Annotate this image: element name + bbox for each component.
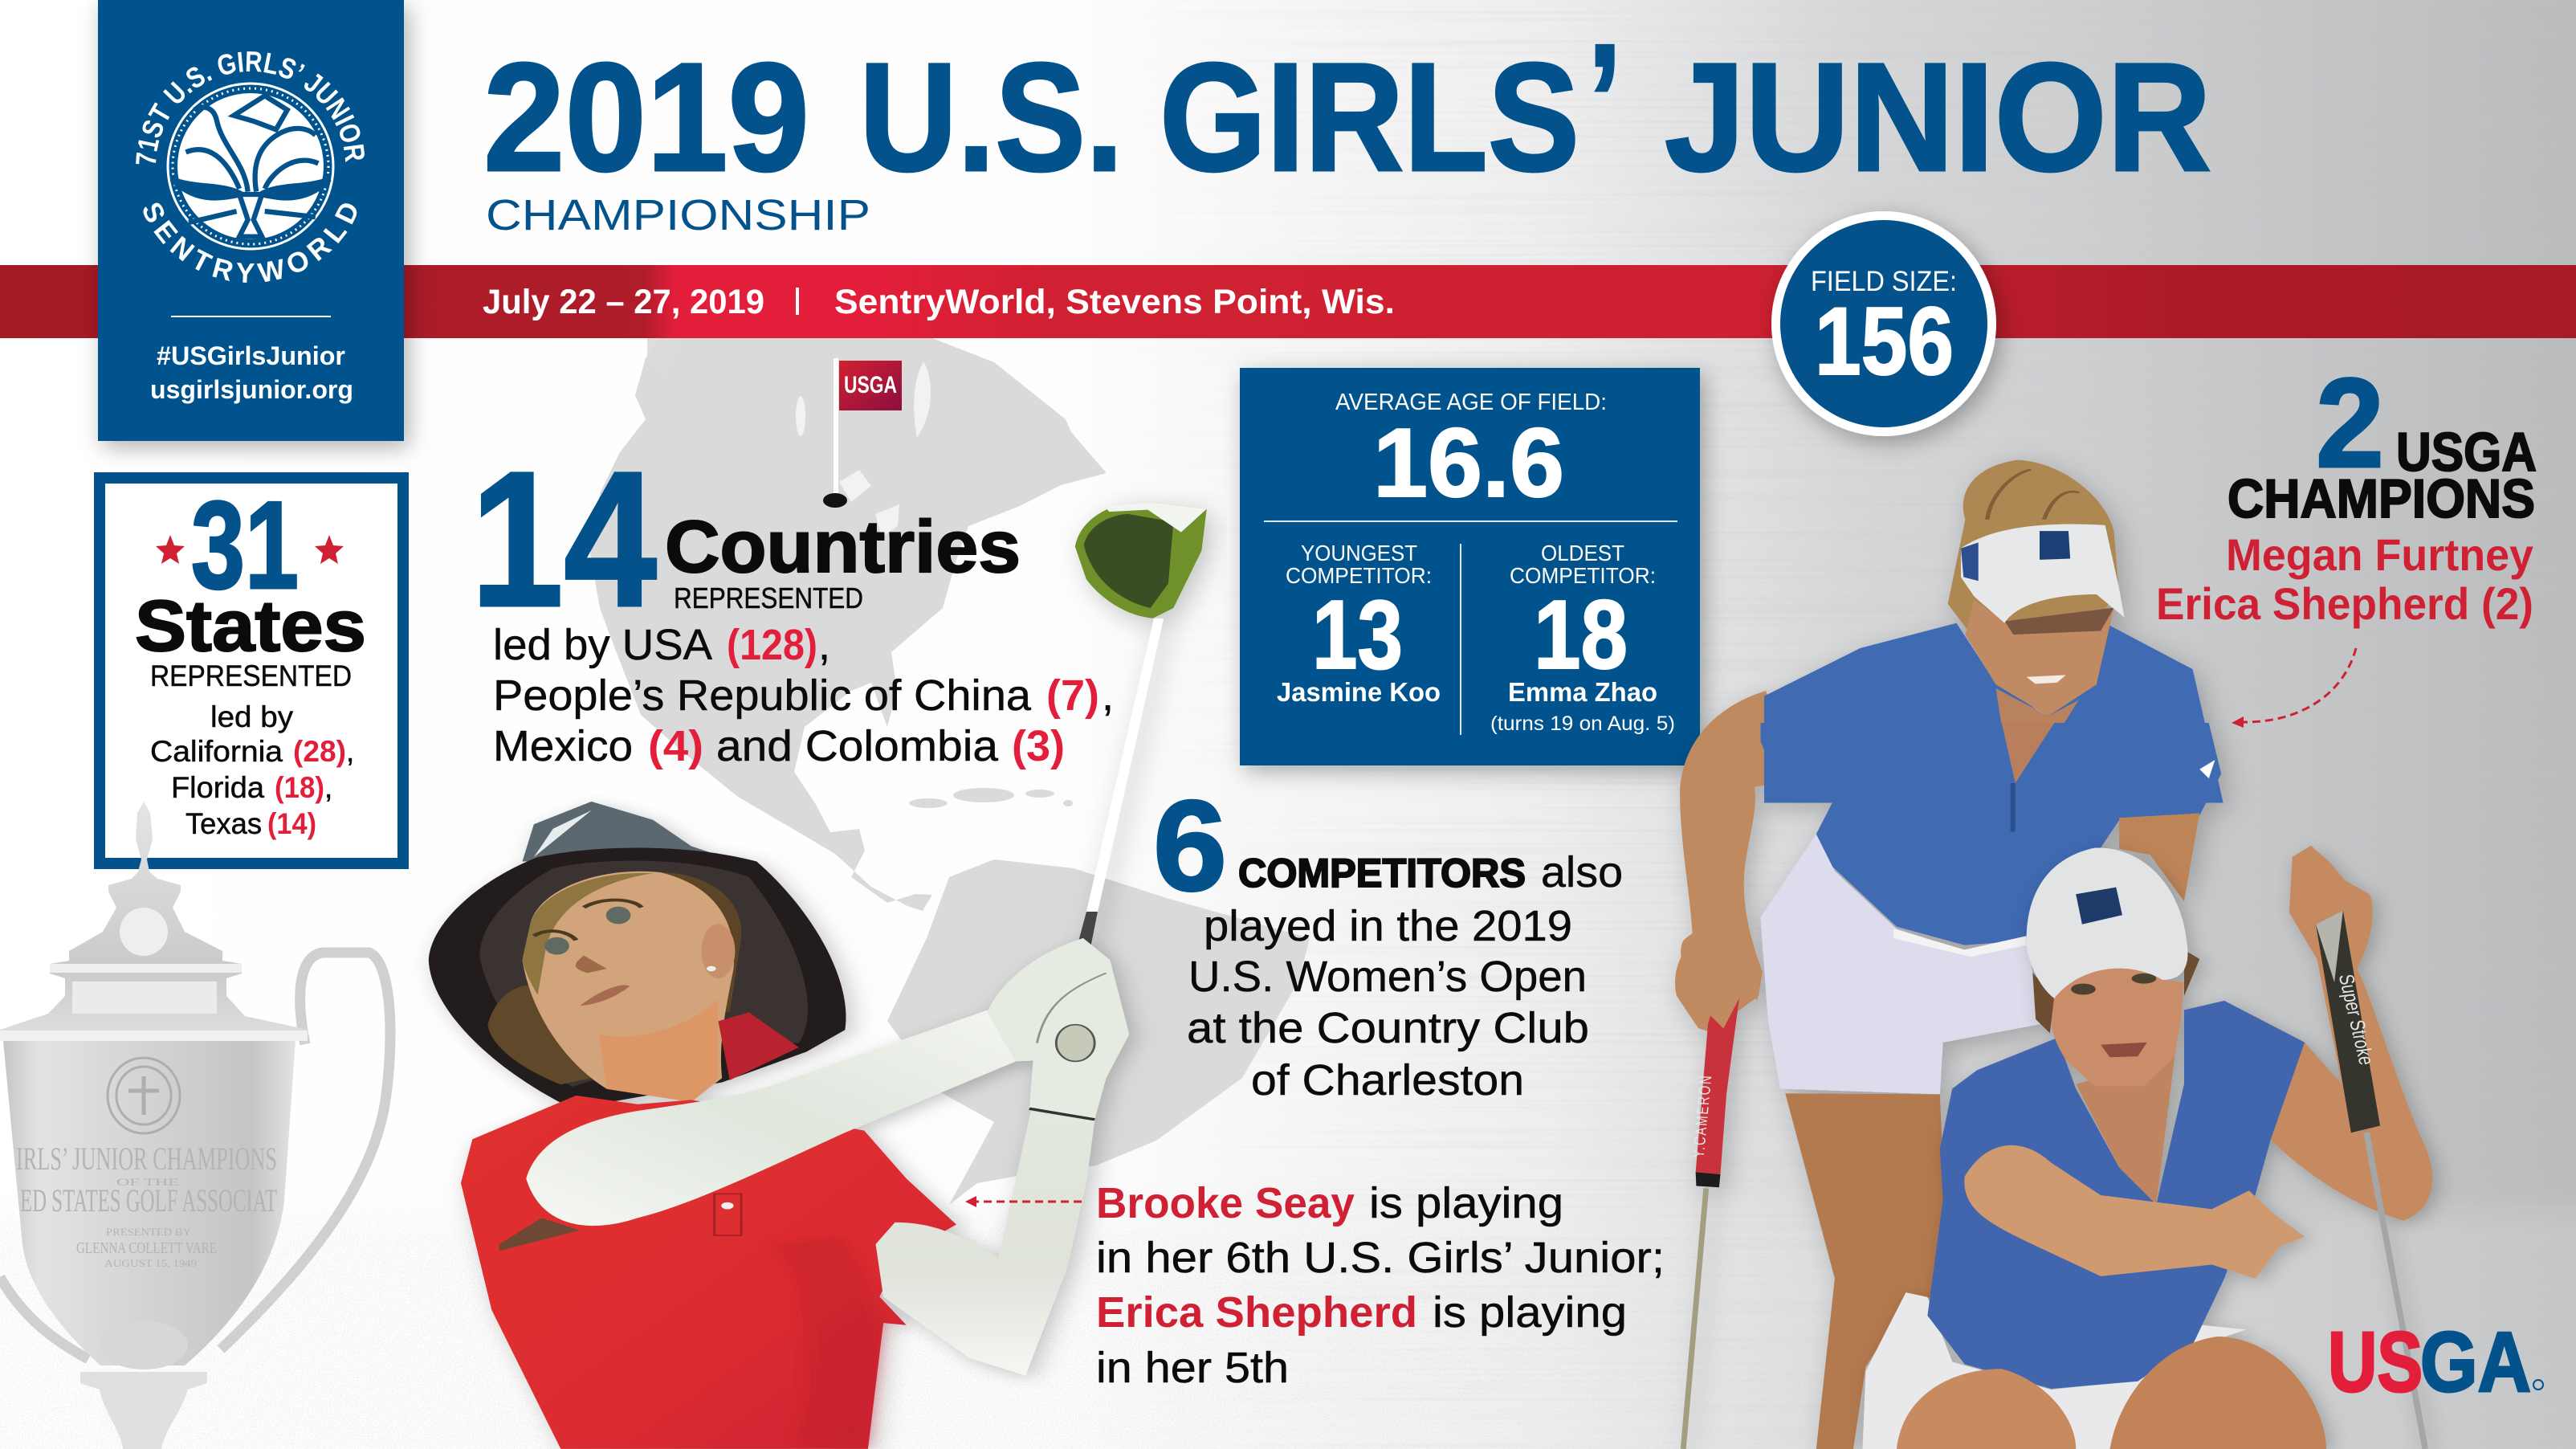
shorts bbox=[1760, 834, 2042, 1094]
putter grip right bbox=[2316, 910, 2380, 1133]
states list: Florida bbox=[171, 771, 264, 804]
states list: , bbox=[324, 771, 332, 804]
brooke seay text: is playing bbox=[1433, 1288, 1627, 1337]
photo: Erica Shepherd bbox=[1863, 846, 2432, 1449]
countries list bbox=[493, 621, 1114, 770]
hair bbox=[2032, 973, 2054, 1033]
world map bbox=[590, 338, 1310, 1205]
facial features bbox=[534, 900, 735, 1006]
left hand bbox=[1681, 920, 1759, 1028]
face bbox=[1965, 600, 2114, 716]
shirt top bbox=[1764, 623, 2223, 803]
trophy engraving: IRLS’ JUNIOR CHAMPIONS bbox=[16, 1141, 277, 1177]
brooke seay text: in her 6th U.S. Girls’ Junior; bbox=[1096, 1234, 1665, 1282]
championship emblem bbox=[136, 51, 365, 283]
oldest competitor: OLDEST bbox=[1541, 541, 1624, 565]
club head bbox=[1075, 502, 1207, 618]
usga logo: GA bbox=[2420, 1315, 2531, 1410]
competitors text block: COMPETITORS bbox=[1238, 851, 1526, 896]
competitors text block: of Charleston bbox=[1251, 1056, 1524, 1104]
youngest competitor: YOUNGEST bbox=[1301, 541, 1417, 565]
shirt bbox=[1927, 1001, 2305, 1389]
states list: led by bbox=[210, 700, 294, 733]
states list bbox=[150, 700, 354, 840]
trophy base bbox=[80, 1372, 207, 1449]
youngest competitor bbox=[1277, 541, 1441, 707]
countries list: led by USA bbox=[493, 621, 712, 669]
average age label: AVERAGE AGE OF FIELD: bbox=[1335, 390, 1607, 415]
glove bbox=[987, 938, 1129, 1120]
logo panel bbox=[90, 0, 422, 461]
venue text: SentryWorld, Stevens Point, Wis. bbox=[834, 283, 1395, 321]
oldest competitor: Emma Zhao bbox=[1508, 677, 1657, 707]
competitors text block: played in the 2019 bbox=[1204, 902, 1572, 950]
youngest competitor: 13 bbox=[1312, 580, 1403, 689]
champions names: Erica Shepherd (2) bbox=[2156, 578, 2533, 629]
countries list: , bbox=[1102, 671, 1114, 720]
represented: REPRESENTED bbox=[150, 659, 352, 692]
brooke seay text: Brooke Seay bbox=[1096, 1179, 1355, 1227]
competitors text block bbox=[1187, 848, 1623, 1104]
knees bbox=[1897, 1369, 2076, 1449]
website: usgirlsjunior.org bbox=[150, 375, 353, 404]
average age value: 16.6 bbox=[1373, 408, 1564, 517]
hat brim bbox=[429, 847, 846, 1108]
usga champions heading: 2 bbox=[2316, 353, 2384, 494]
countries list: (3) bbox=[1012, 722, 1065, 770]
countries list: People’s Republic of China bbox=[493, 671, 1032, 720]
youngest competitor: COMPETITOR: bbox=[1286, 563, 1432, 588]
neck bbox=[1996, 688, 2079, 803]
countries heading: Countries bbox=[665, 506, 1021, 588]
competitors text block: also bbox=[1541, 848, 1623, 896]
red polo bbox=[461, 1096, 956, 1449]
states list: (18) bbox=[275, 771, 324, 804]
field size badge bbox=[1771, 211, 1996, 436]
states list: (14) bbox=[267, 807, 316, 840]
trophy handles bbox=[0, 953, 390, 1359]
number 31: 31 bbox=[191, 476, 299, 614]
countries list: (128) bbox=[727, 621, 817, 669]
putter shaft left bbox=[1683, 1188, 1706, 1449]
usga champions heading bbox=[2228, 353, 2537, 529]
shirt lower bbox=[1760, 723, 2221, 945]
pointing arm bbox=[1964, 1145, 2305, 1279]
championship emblem: SENTRYWORLD bbox=[143, 202, 357, 283]
countries represented: REPRESENTED bbox=[674, 582, 863, 614]
right upper arm bbox=[2119, 813, 2199, 901]
field size label: FIELD SIZE: bbox=[1811, 266, 1957, 297]
club grip bbox=[1078, 912, 1098, 948]
brooke seay text bbox=[1096, 1179, 1665, 1392]
flag and hole: USGA bbox=[844, 372, 897, 398]
usga logo bbox=[2328, 1315, 2543, 1410]
countries list: and Colombia bbox=[716, 722, 999, 770]
youngest competitor: Jasmine Koo bbox=[1277, 677, 1441, 707]
trophy engraving bbox=[16, 1141, 277, 1269]
oldest competitor: (turns 19 on Aug. 5) bbox=[1490, 712, 1675, 735]
number 6: 6 bbox=[1153, 773, 1227, 917]
arrow to champions bbox=[2232, 648, 2356, 728]
divider pipe bbox=[796, 288, 799, 315]
trophy engraving: GLENNA COLLETT VARE bbox=[76, 1239, 217, 1257]
states list: , bbox=[346, 735, 354, 768]
flag and hole bbox=[823, 358, 902, 508]
states heading: States bbox=[135, 586, 366, 667]
hair bbox=[487, 986, 592, 1084]
left arm bbox=[1675, 691, 1779, 1032]
logo divider bbox=[171, 316, 331, 317]
right arm and hand bbox=[2270, 846, 2432, 1221]
title: ’ bbox=[1588, 11, 1622, 190]
states list: (28) bbox=[293, 735, 346, 768]
collar bbox=[718, 1012, 799, 1080]
trophy engraving: PRESENTED BY bbox=[106, 1226, 192, 1238]
competitors text block: U.S. Women’s Open bbox=[1188, 953, 1587, 1001]
brooke seay text: in her 5th bbox=[1096, 1344, 1289, 1392]
countries list: (7) bbox=[1046, 671, 1099, 720]
white shorts bbox=[1863, 1292, 2246, 1449]
oldest competitor: 18 bbox=[1534, 580, 1628, 689]
states list: California bbox=[150, 735, 283, 768]
oldest competitor bbox=[1490, 541, 1675, 735]
usga logo: US bbox=[2328, 1315, 2423, 1410]
golf club bbox=[1075, 502, 1207, 948]
usga champions heading: USGA bbox=[2396, 422, 2537, 483]
panel: age stats bbox=[1240, 368, 1700, 765]
lower arm sleeve bbox=[876, 1111, 1094, 1375]
hair bbox=[1948, 460, 2118, 639]
upper arm sleeve bbox=[526, 1010, 1017, 1226]
photo: Erica Shepherd: Super Stroke bbox=[2334, 973, 2378, 1067]
countries list: Mexico bbox=[493, 722, 633, 770]
lower body bbox=[1681, 723, 2221, 1449]
trophy body bbox=[3, 1041, 296, 1365]
champions names bbox=[2156, 529, 2533, 629]
countries list: (4) bbox=[648, 722, 703, 770]
photo: Megan Furtney bbox=[1675, 460, 2223, 1449]
title: JUNIOR bbox=[1665, 31, 2211, 203]
trophy finial and lid bbox=[0, 802, 308, 1041]
competitors text block: at the Country Club bbox=[1187, 1004, 1589, 1052]
oldest competitor: COMPETITOR: bbox=[1510, 563, 1656, 588]
title: U.S. bbox=[859, 31, 1123, 203]
title: 2019 bbox=[483, 31, 809, 203]
star right bbox=[315, 535, 344, 564]
leg bbox=[1785, 1093, 1946, 1449]
face bbox=[2052, 968, 2184, 1087]
hashtag: #USGirlsJunior bbox=[157, 341, 345, 370]
trophy engraving: OF THE bbox=[116, 1176, 179, 1188]
champions names: Megan Furtney bbox=[2226, 529, 2533, 580]
hat crown bbox=[522, 802, 737, 862]
arrow to Brooke Seay bbox=[965, 1196, 1082, 1207]
putter shaft right bbox=[2366, 1133, 2425, 1449]
countries list: , bbox=[818, 621, 830, 669]
cap bbox=[2027, 848, 2188, 998]
photo: Brooke Seay bbox=[429, 802, 1129, 1449]
number 14: 14 bbox=[471, 431, 657, 647]
visor bbox=[1961, 524, 2125, 623]
putter grip left bbox=[1696, 949, 1746, 1174]
trophy engraving: AUGUST 15, 1949 bbox=[104, 1257, 197, 1269]
states list: Texas bbox=[185, 807, 262, 840]
star left bbox=[156, 535, 185, 564]
face bbox=[522, 871, 734, 1102]
trophy seal bbox=[108, 1058, 180, 1133]
red date bar bbox=[0, 265, 2576, 338]
title: GIRLS bbox=[1160, 31, 1579, 203]
lower body: Y.CAMERON bbox=[1689, 1074, 1715, 1158]
upper body bbox=[1764, 460, 2223, 803]
subtitle: CHAMPIONSHIP bbox=[486, 191, 870, 239]
brooke seay text: is playing bbox=[1369, 1179, 1563, 1227]
date text: July 22 – 27, 2019 bbox=[483, 283, 764, 321]
trophy engraving: ED STATES GOLF ASSOCIAT bbox=[20, 1182, 277, 1218]
brooke seay text: Erica Shepherd bbox=[1096, 1288, 1417, 1337]
panel: states bbox=[100, 476, 403, 863]
championship emblem: 71ST U.S. GIRLS’ JUNIOR bbox=[136, 51, 365, 164]
field size number: 156 bbox=[1815, 288, 1954, 395]
title bbox=[483, 11, 2211, 203]
trophy bbox=[0, 802, 390, 1449]
usga champions heading: CHAMPIONS bbox=[2228, 468, 2535, 529]
club shaft bbox=[1086, 618, 1164, 912]
